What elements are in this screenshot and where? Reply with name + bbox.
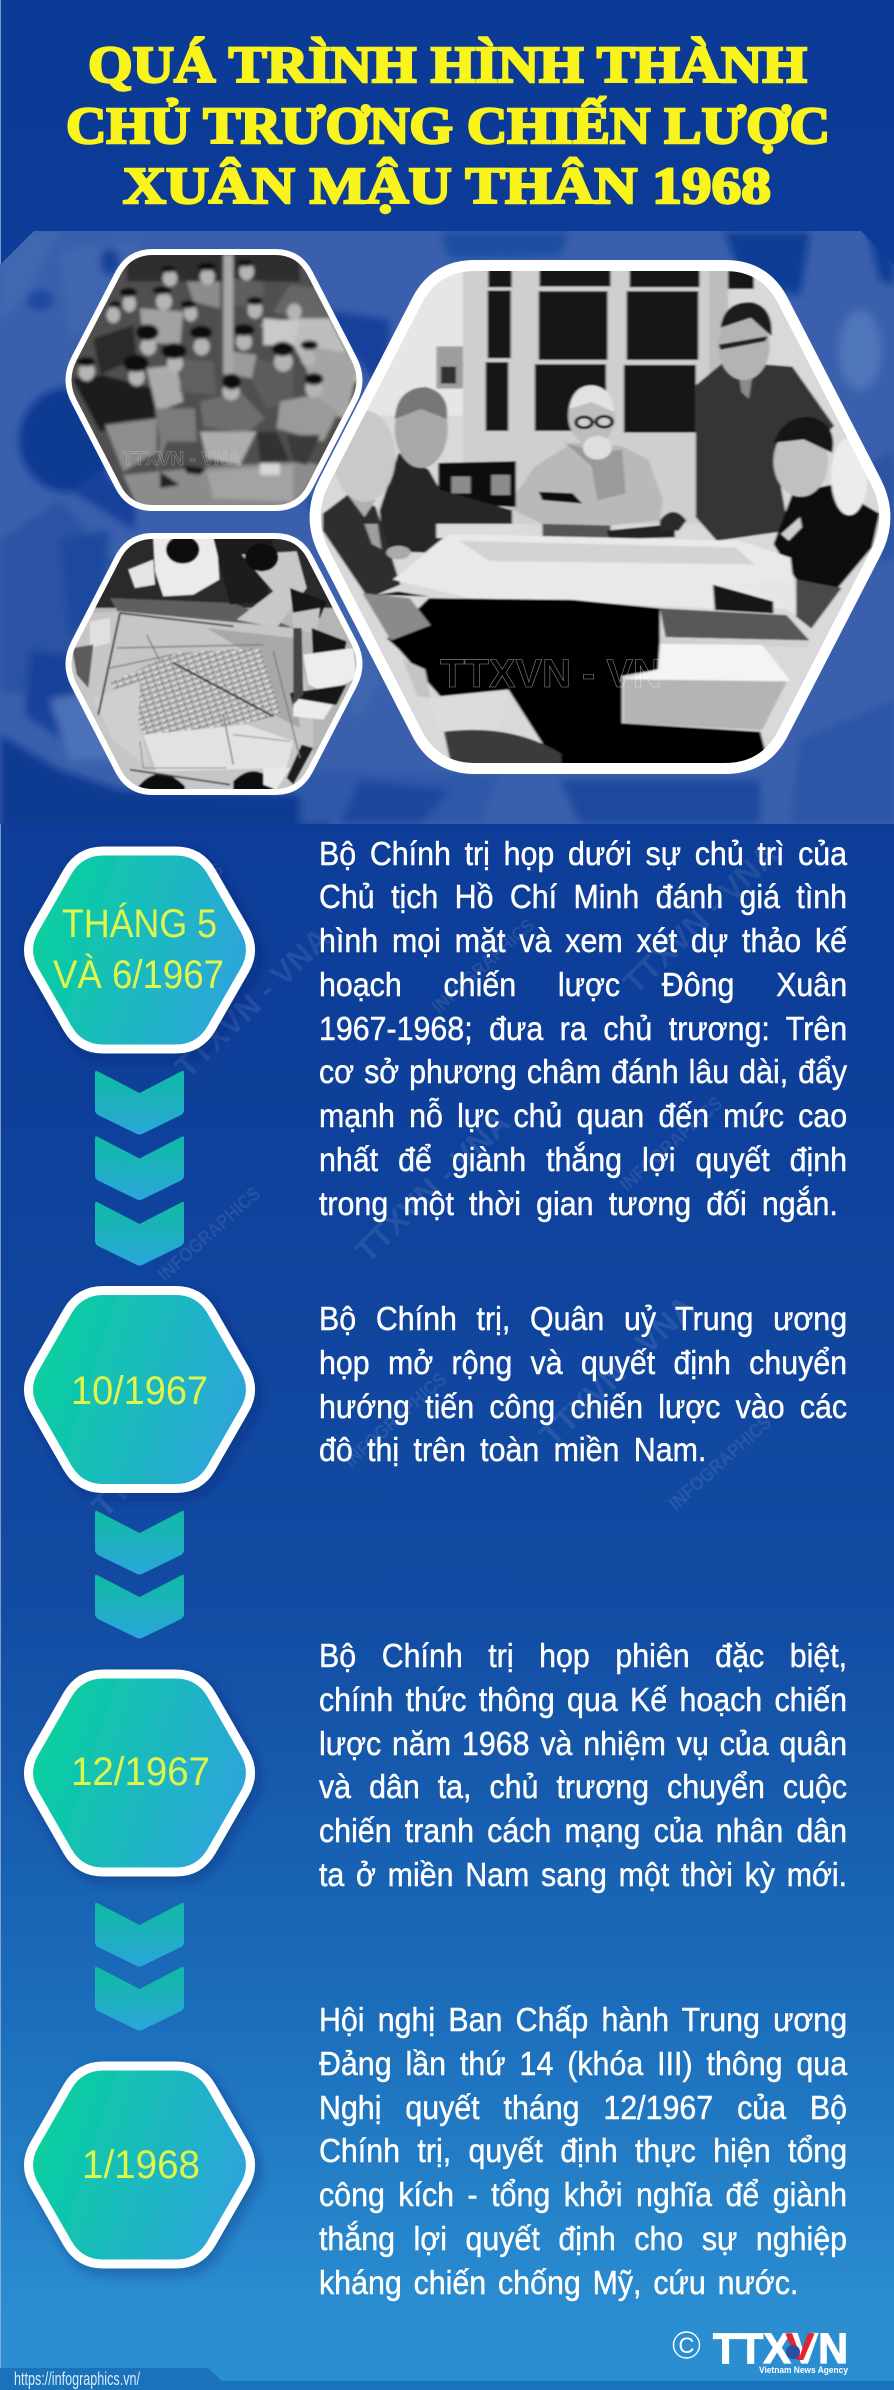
- watermarks: [85, 836, 785, 1524]
- text block: October 1967: Bộ Chính trị, Quân uỷ Trung ương: [319, 1300, 847, 1337]
- footer strip: [0, 2368, 894, 2390]
- date badge: 12/1967: [28, 1674, 250, 1872]
- arrow: chevrons after badge 2: [95, 1511, 184, 1638]
- text block: January 1968: Nghị quyết tháng 12/1967 của Bộ: [319, 2088, 847, 2126]
- watermarks: TTXVN - VNA: [533, 1288, 702, 1453]
- date badge: Tháng 5 và 6/1967: [28, 851, 250, 1049]
- text block: May and June 1967: trong một thời gian tương đối ngắn.: [319, 1185, 838, 1222]
- date badge: 1/1968: [28, 2066, 250, 2264]
- arrow: chevrons after badge 1: [95, 1071, 184, 1266]
- text block: January 1968: Chính trị, quyết định thực hiện tổng: [319, 2132, 847, 2169]
- date badge: Tháng 5 và 6/1967: THÁNG 5: [62, 901, 217, 946]
- photo band background: [0, 225, 894, 830]
- title: [66, 36, 830, 215]
- date badge: 10/1967: 10/1967: [71, 1369, 208, 1413]
- watermarks: TTXVN - VNA: [168, 920, 337, 1085]
- watermarks: INFOGRAPHICS: [616, 1093, 727, 1196]
- text block: December 1967: và dân ta, chủ trương chuyển cuộc: [319, 1768, 847, 1805]
- watermarks: INFOGRAPHICS: [154, 1183, 265, 1286]
- photo: Hồ Chí Minh and leaders at the meeting table: TTXVN - VN: [440, 651, 662, 695]
- text block: January 1968: thắng lợi quyết định cho sự nghiệp: [319, 2220, 847, 2257]
- text block: December 1967: lược năm 1968 và nhiệm vụ của quân: [319, 1724, 847, 1762]
- text block: January 1968: [319, 2001, 848, 2302]
- text block: May and June 1967: nhất để giành thắng lợi quyết định: [319, 1141, 847, 1178]
- text block: January 1968: Hội nghị Ban Chấp hành Trung ương: [319, 2001, 847, 2038]
- text block: May and June 1967: [319, 835, 848, 1222]
- date badge: Tháng 5 và 6/1967: VÀ 6/1967: [53, 952, 224, 997]
- text block: May and June 1967: hoạch chiến lược Đông Xuân: [319, 966, 847, 1003]
- arrow: chevrons after badge 3: [95, 1903, 184, 2030]
- watermarks: INFOGRAPHICS: [340, 1369, 451, 1472]
- text block: May and June 1967: mạnh nỗ lực chủ quan đến mức cao: [319, 1097, 847, 1134]
- text block: December 1967: chiến tranh cách mạng của nhân dân: [319, 1812, 847, 1849]
- text block: October 1967: đô thị trên toàn miền Nam.: [319, 1431, 706, 1468]
- date badge: 10/1967: [28, 1290, 250, 1488]
- photo: Hồ Chí Minh and leaders at the meeting table: [300, 250, 894, 780]
- text block: May and June 1967: 1967-1968; đưa ra chủ trương: Trên: [319, 1010, 847, 1047]
- text block: October 1967: [319, 1300, 847, 1468]
- logo: TTXVN: TTXVN: [713, 2325, 848, 2373]
- watermarks: INFOGRAPHICS: [665, 1412, 776, 1515]
- text block: October 1967: hướng tiến công chiến lược vào các: [319, 1388, 847, 1424]
- text block: October 1967: họp mở rộng và quyết định chuyển: [319, 1344, 847, 1381]
- title: QUÁ TRÌNH HÌNH THÀNH: [88, 36, 807, 94]
- text block: May and June 1967: cơ sở phương châm đánh lâu dài, đẩy: [319, 1053, 847, 1090]
- title: XUÂN MẬU THÂN 1968: [123, 157, 771, 215]
- logo: copyright sign: C: [679, 2333, 695, 2358]
- footer url: https://infographics.vn/: [14, 2369, 140, 2389]
- watermarks: INFOGRAPHICS: [117, 859, 228, 962]
- logo: TTXVN: V: [785, 2326, 815, 2369]
- text block: December 1967: [318, 1637, 847, 1894]
- text block: January 1968: Đảng lần thứ 14 (khóa III) thông qua: [319, 2045, 847, 2082]
- watermarks: INFOGRAPHICS: [428, 915, 539, 1018]
- text block: December 1967: ta ở miền Nam sang một thời kỳ mới.: [319, 1856, 847, 1893]
- watermarks: TTXVN - VNA: [85, 1359, 254, 1524]
- logo: TTXVN: Vietnam News Agency: [759, 2365, 849, 2376]
- photo: people studying a city map on the floor: [60, 528, 370, 798]
- text block: January 1968: kháng chiến chống Mỹ, cứu nước.: [319, 2264, 798, 2300]
- text block: December 1967: chính thức thông qua Kế hoạch chiến: [319, 1681, 847, 1718]
- text block: January 1968: công kích - tổng khởi nghĩa để giành: [319, 2176, 847, 2213]
- text block: May and June 1967: Bộ Chính trị họp dưới sự chủ trì của: [319, 835, 847, 872]
- text block: May and June 1967: Chủ tịch Hồ Chí Minh đánh giá tình: [319, 878, 847, 915]
- decorative left edge line: [0, 0, 1, 2390]
- photo: soldiers gathered around a sand table: [60, 245, 370, 515]
- title: CHỦ TRƯƠNG CHIẾN LƯỢC: [66, 95, 830, 155]
- photo: soldiers gathered around a sand table: TTXVN - VNA: [122, 449, 242, 470]
- text block: May and June 1967: hình mọi mặt và xem xét dự thảo kế: [319, 922, 847, 959]
- watermarks: TTXVN - VNA: [616, 836, 785, 1001]
- watermarks: TTXVN - VNA: [348, 1104, 517, 1269]
- text block: December 1967: Bộ Chính trị họp phiên đặc biệt,: [319, 1637, 847, 1674]
- date badge: 12/1967: 12/1967: [71, 1750, 210, 1794]
- logo: copyright sign: [674, 2332, 700, 2358]
- date badge: 1/1968: 1/1968: [82, 2143, 200, 2187]
